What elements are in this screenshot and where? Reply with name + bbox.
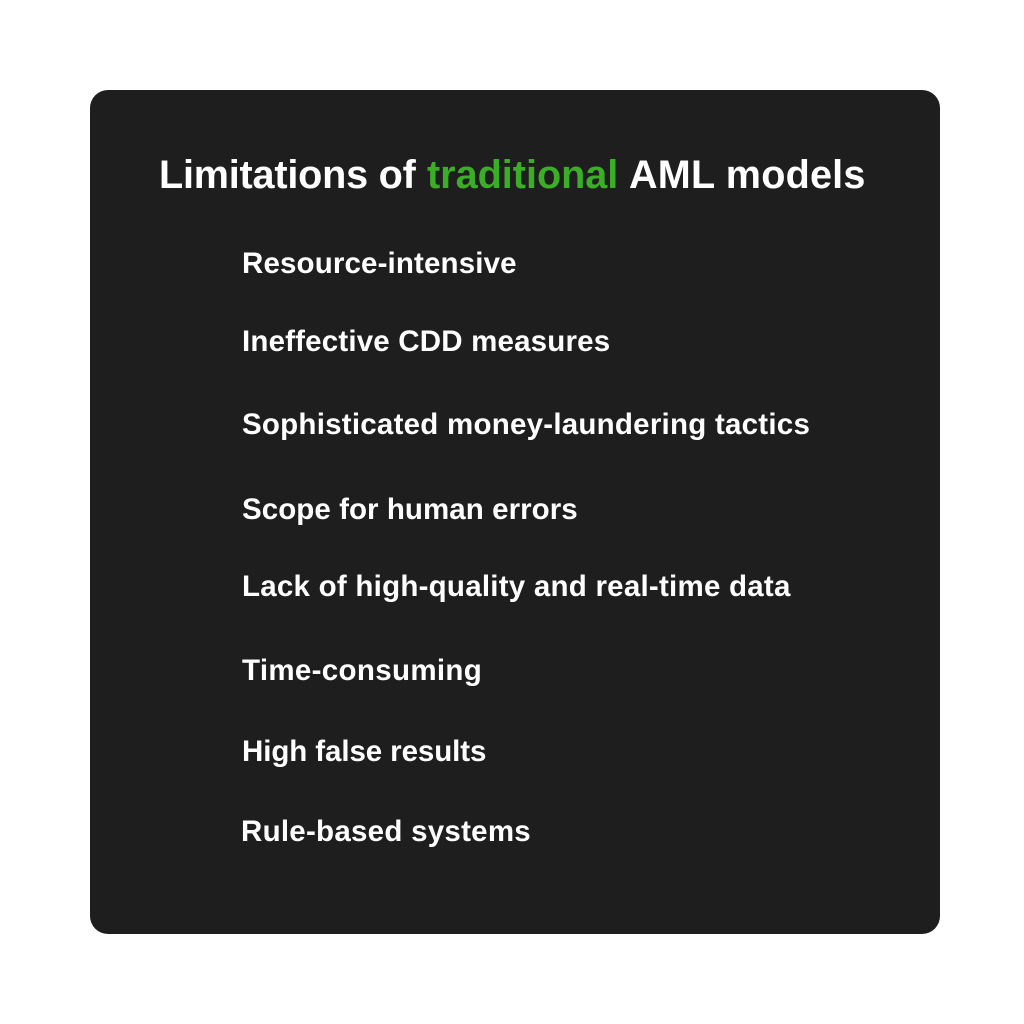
- title: AML models: [629, 153, 866, 197]
- list item: High false results: High false results: [242, 735, 486, 768]
- list item: Lack of high-quality and real-time data: Lack of high-quality and real-time data: [242, 570, 791, 603]
- list item: Ineffective CDD measures: Ineffective CDD measures: [242, 325, 610, 358]
- list item: Scope for human errors: Scope for human errors: [242, 493, 578, 526]
- title: Limitations of: [159, 153, 416, 197]
- list item: Time-consuming: Time-consuming: [242, 654, 482, 687]
- list item: Sophisticated money-laundering tactics: Sophisticated money-laundering tactics: [242, 408, 810, 441]
- title: traditional: [427, 153, 618, 197]
- title: [159, 153, 866, 197]
- list item: Resource-intensive: Resource-intensive: [242, 247, 517, 280]
- list item: Rule-based systems: Rule-based systems: [241, 815, 531, 848]
- panel: dark card: [90, 90, 940, 934]
